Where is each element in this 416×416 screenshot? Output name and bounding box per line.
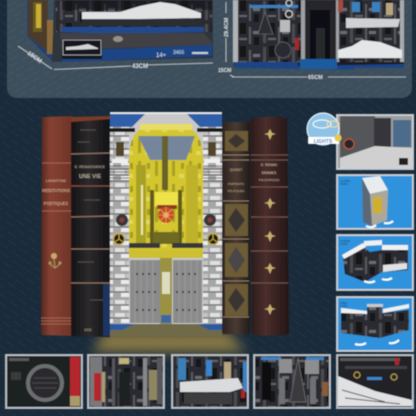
icon: red rose window: [158, 207, 174, 223]
dimension: 43CM: [54, 63, 213, 70]
age and piece count: 14+: [156, 53, 167, 59]
thumbnail: red column: [87, 354, 165, 409]
icon: right gold gear: [208, 234, 218, 244]
thumbnail: expand form: EXPAND: [340, 240, 350, 243]
bottom row: detail thumbnails: [5, 354, 414, 409]
icon: right wall lamp: [204, 214, 216, 226]
book: Une Vie: 1911: [84, 328, 92, 332]
main product: book nook between books: [41, 112, 289, 337]
dimension: 65CM: 65CM: [308, 75, 323, 81]
thumbnail: closed form: [336, 174, 414, 230]
thumbnail: round window: [5, 354, 83, 409]
icon: left wall lamp: [116, 214, 128, 226]
thumbnail: ship deck: [171, 354, 249, 409]
door passage: [129, 250, 203, 258]
book: Portraits Politiques: PORTRAITS: [228, 182, 244, 186]
dimension: 18CM: [18, 46, 52, 69]
book: Meditations Poetiques: POETIQUES: [44, 201, 68, 206]
book: Meditations Poetiques: LAMARTINE: [46, 179, 67, 183]
icon: gold book ornaments: [264, 129, 276, 315]
open model photo: [233, 0, 404, 70]
dimension: 15CM: 15CM: [218, 68, 231, 74]
boxed set photo: 3466: [173, 50, 184, 56]
thumbnail: closed form: CLOSED: [340, 180, 350, 183]
dimension: 18CM: 18CM: [26, 51, 42, 65]
book: Portraits Politiques: POLITIQUES: [228, 189, 245, 193]
thumbnail: open form: OPEN: [340, 302, 347, 305]
book nook model: [110, 112, 222, 336]
book: Une Vie: [71, 116, 110, 337]
yellow lit arch interior: [129, 124, 203, 292]
dimension: 15CM: [218, 68, 234, 77]
panel: product dimensions: [7, 0, 412, 98]
book: Meditations Poetiques: [41, 116, 72, 336]
book: Portraits Politiques: QUINET: [230, 168, 242, 172]
book: E. Renan Drames: PHILOSOPHIQUES: [259, 180, 280, 182]
book: Une Vie: UNE VIE: [79, 174, 101, 180]
dimension: 43CM: 43CM: [132, 64, 148, 70]
thumbnail: open form: FORM: [340, 305, 347, 308]
boxed set photo: [27, 0, 213, 62]
book: E. Renan Drames: E. RENAN: [261, 163, 278, 167]
thumbnail: open form: [336, 296, 414, 352]
book: E. Renan Drames: [250, 117, 289, 336]
thumbnail: expand form: [336, 234, 414, 291]
icon: floral ornament: [48, 253, 62, 268]
dimension: 29.4CM: 29.4CM: [224, 17, 230, 37]
badge: lights: LIGHTS: [314, 139, 333, 145]
product name card: [62, 39, 102, 59]
book: Portraits Politiques: [222, 122, 250, 334]
book: Meditations Poetiques: MEDITATIONS: [42, 188, 70, 193]
book: E. Renan Drames: DRAMES: [262, 171, 277, 175]
dimension: 29.4CM: [224, 2, 230, 62]
book: Une Vie: E. RENAISSANCE: [75, 165, 106, 169]
thumbnail: ship hull: [336, 354, 414, 409]
thumbnail: lights switch detail: [336, 114, 414, 170]
light glow under model: [92, 332, 246, 352]
left gate door: [130, 260, 160, 323]
thumbnail: expand form: FORM: [340, 243, 347, 246]
thumbnail: closed form: FORM: [340, 183, 347, 186]
icon: left gold gear: [114, 234, 124, 244]
right column: detail thumbnails: [307, 113, 414, 352]
right gate door: [173, 260, 202, 323]
badge: lights: [307, 113, 342, 145]
thumbnail: dark gothic wall: [253, 354, 331, 409]
